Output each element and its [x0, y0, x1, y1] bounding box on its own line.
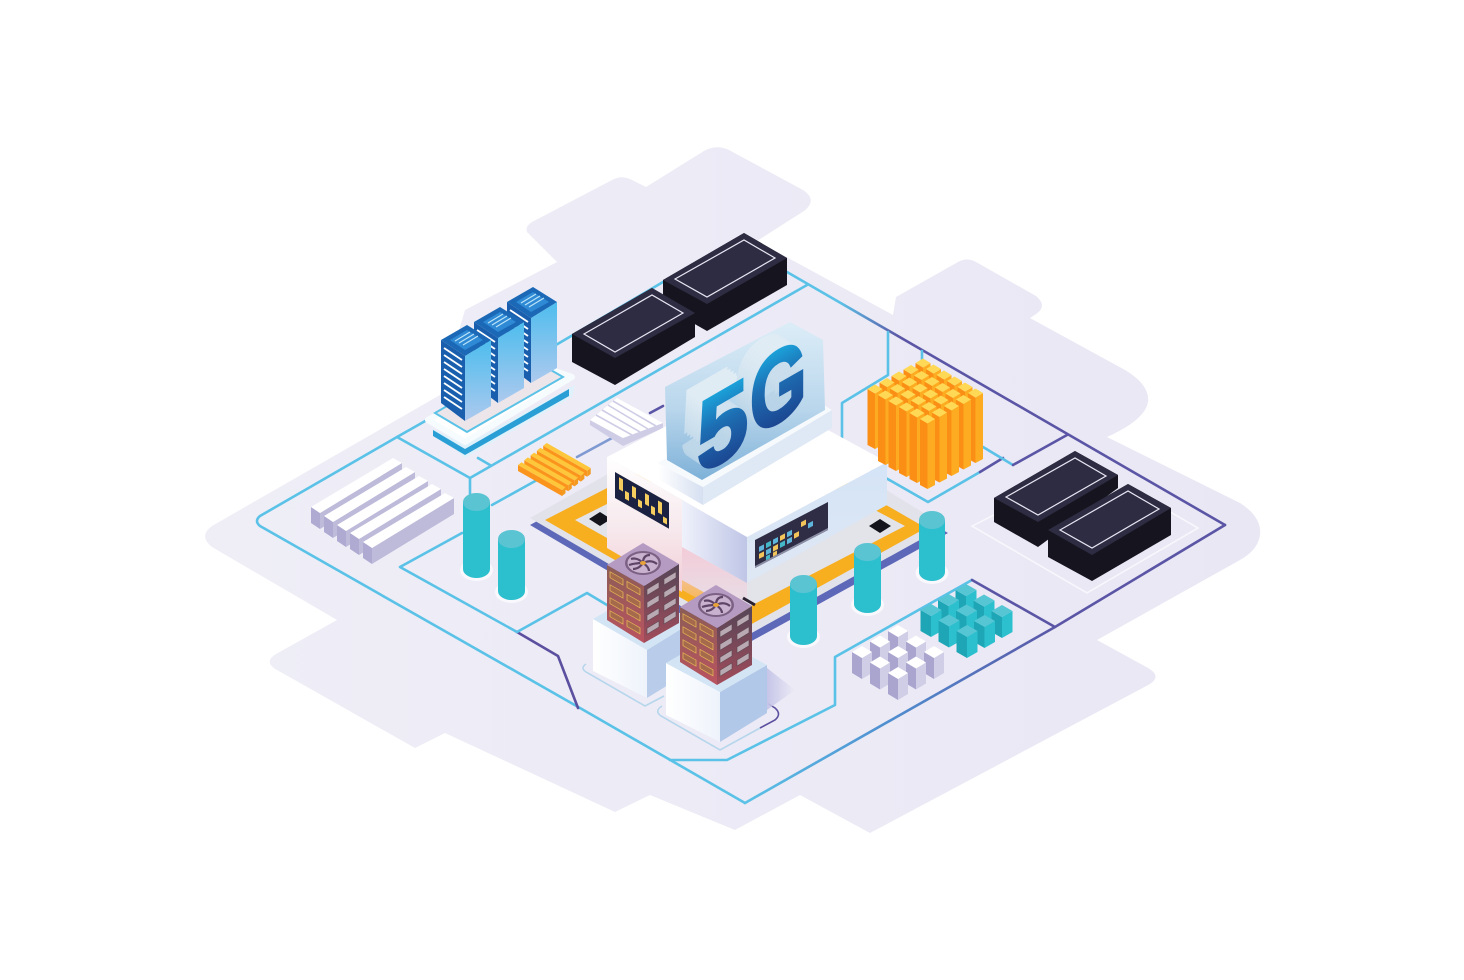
- server cable: [743, 598, 755, 605]
- white fins centre: [590, 398, 663, 446]
- 5G label: 5: [690, 350, 741, 493]
- 5G label: G: [743, 309, 800, 455]
- 5G label: 5: [684, 346, 735, 489]
- teal block grid: [920, 584, 1012, 658]
- main building: [607, 385, 887, 625]
- server A plinth: [593, 592, 694, 698]
- white heat fins left: [311, 458, 454, 564]
- left window: [615, 472, 669, 529]
- 5G label: 5: [693, 352, 744, 495]
- 5G label: G: [750, 314, 807, 460]
- plinth outlines: [583, 664, 778, 750]
- 5G glass block: [665, 322, 825, 480]
- 5G label: G: [737, 305, 794, 451]
- plinth shadow: [767, 668, 795, 710]
- 5G label: G: [746, 311, 803, 457]
- server B plinth: [666, 636, 767, 742]
- server A: [607, 543, 679, 643]
- 5G label: G: [740, 307, 797, 453]
- black chip blocks right: [994, 451, 1171, 581]
- server B: [680, 585, 752, 685]
- 5G label: 5: [687, 348, 738, 491]
- blue server towers: [441, 287, 557, 421]
- gold heat sink: [868, 358, 983, 489]
- teal cylinders: [460, 493, 948, 648]
- circuit traces: [257, 272, 1225, 803]
- 5G label: [681, 303, 807, 498]
- 5G label: 5: [681, 344, 732, 487]
- white outline under right chips: [972, 497, 1198, 593]
- chip base with gold ring: [530, 400, 948, 648]
- 5G label: G: [734, 303, 791, 449]
- 5G plinth: [658, 385, 832, 505]
- 5G label: 5: [697, 355, 748, 498]
- right window: [755, 502, 828, 568]
- white block grid: [852, 625, 944, 700]
- orange fins: [518, 443, 591, 496]
- server tower platform: [428, 358, 575, 458]
- black chip blocks top: [572, 233, 787, 385]
- ground silhouette: [205, 147, 1260, 833]
